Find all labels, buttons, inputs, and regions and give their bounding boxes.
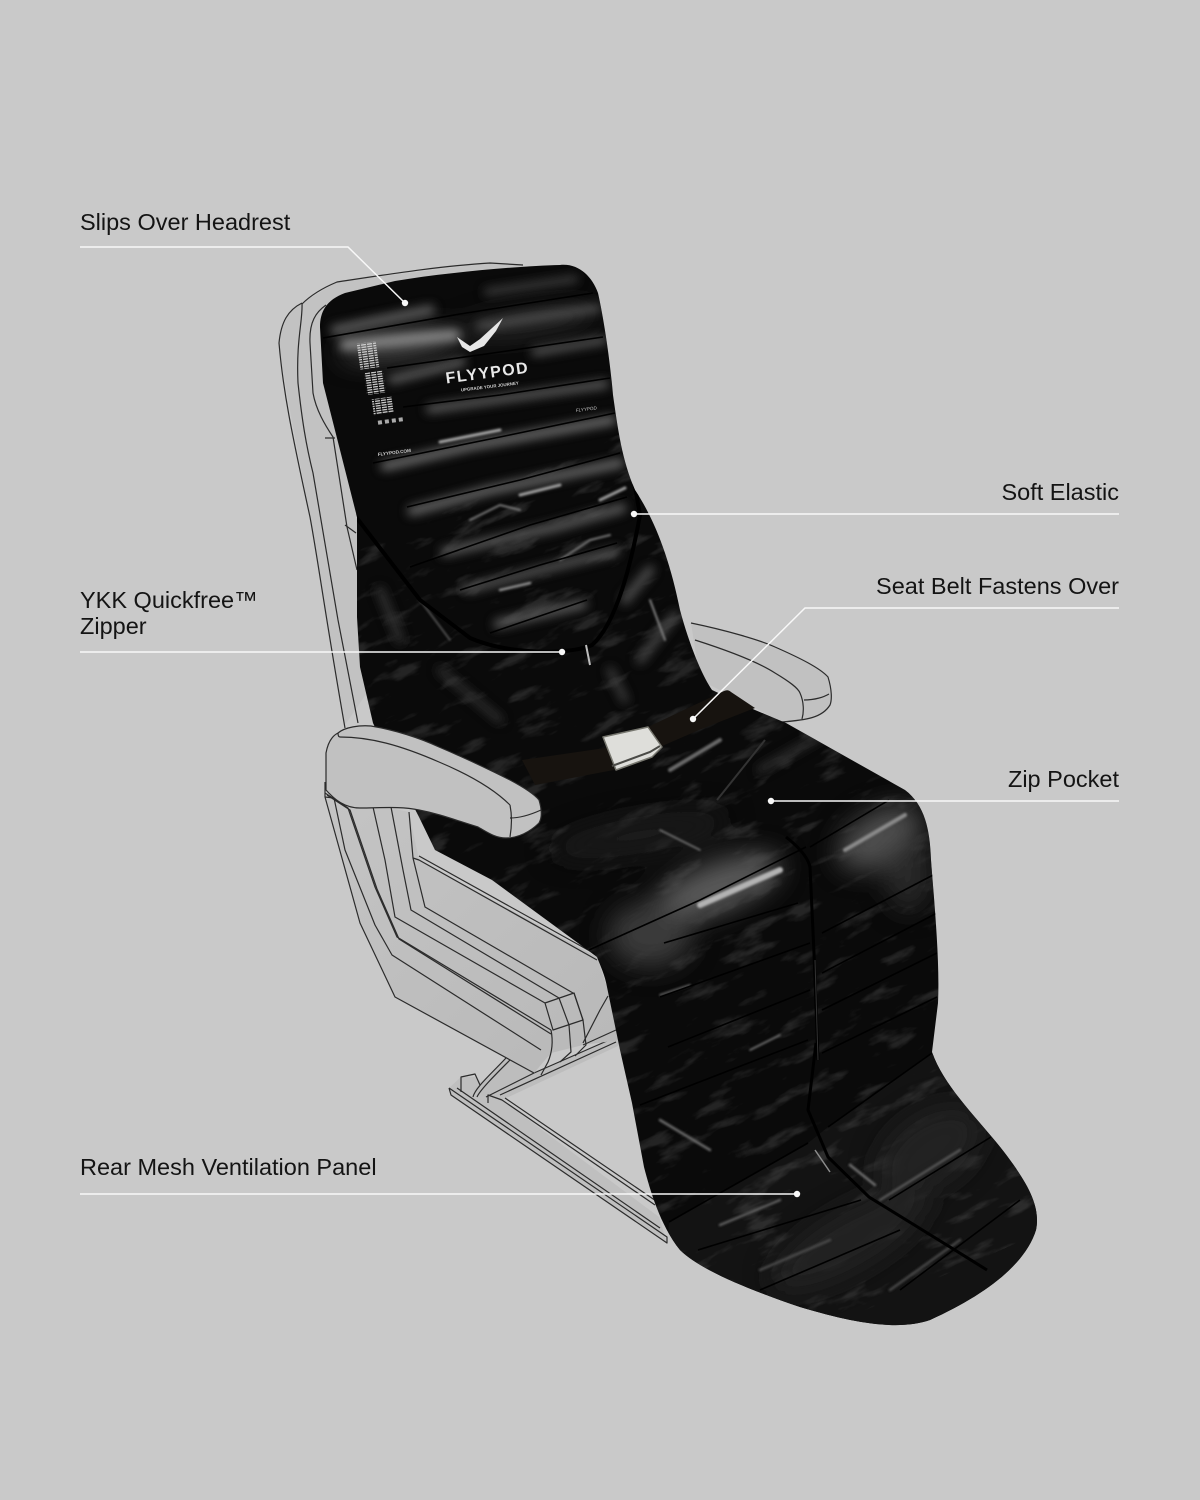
blanket: sharp glints <box>420 430 960 1290</box>
seat: lower shell and cushion <box>325 782 620 1075</box>
blanket: quilt seams <box>323 293 1020 1290</box>
label: model mark: FLYYPOD <box>576 405 598 413</box>
seat belt buckle <box>603 727 662 770</box>
logo: FLYYPOD wordmark: FLYYPOD <box>445 360 530 387</box>
blanket: front zipper <box>786 837 987 1270</box>
callout: Seat Belt Fastens Over <box>690 573 1119 722</box>
callout: Rear Mesh Ventilation Panel: Rear Mesh Ventilation Panel <box>80 1154 377 1180</box>
callout: Zip Pocket: Zip Pocket <box>1008 766 1119 792</box>
blanket: crumple texture <box>357 434 1034 1310</box>
logo: wing mark <box>457 318 503 352</box>
label: care text block <box>357 339 403 426</box>
callout: YKK Quickfree Zipper: YKK Quickfree™ <box>80 587 258 613</box>
callout: Soft Elastic <box>631 479 1119 517</box>
callout: YKK Quickfree Zipper <box>80 587 565 655</box>
blanket: zip pocket <box>717 740 765 800</box>
callout: Slips Over Headrest <box>80 209 408 306</box>
callout: Seat Belt Fastens Over: Seat Belt Fastens Over <box>876 573 1119 599</box>
callout: Soft Elastic: Soft Elastic <box>1001 479 1119 505</box>
blanket: foot panel wrinkles <box>660 1053 1040 1330</box>
blanket: quilt channel highlights <box>335 279 830 770</box>
logo: tagline: UPGRADE YOUR JOURNEY <box>461 380 519 393</box>
seat belt strap <box>522 690 755 785</box>
blanket: soft broad sheen <box>339 302 1000 1311</box>
callout: Slips Over Headrest: Slips Over Headrest <box>80 209 291 235</box>
seat: backrest outline <box>279 263 560 728</box>
label: website: FLYYPOD.COM <box>378 448 411 457</box>
seat: floor rail and strut <box>449 1037 667 1243</box>
seat: far armrest <box>691 623 831 722</box>
blanket: YKK zipper pull <box>586 645 590 665</box>
blanket: soft elastic opening <box>353 470 640 652</box>
callout: YKK Quickfree Zipper: Zipper <box>80 613 147 639</box>
callout: Zip Pocket <box>768 766 1119 804</box>
blanket: quilted black sleeping pod <box>320 264 1037 1326</box>
callout: Rear Mesh Ventilation Panel <box>80 1154 800 1197</box>
infographic: product diagram <box>80 213 1119 1326</box>
seat: near armrest <box>326 726 541 838</box>
